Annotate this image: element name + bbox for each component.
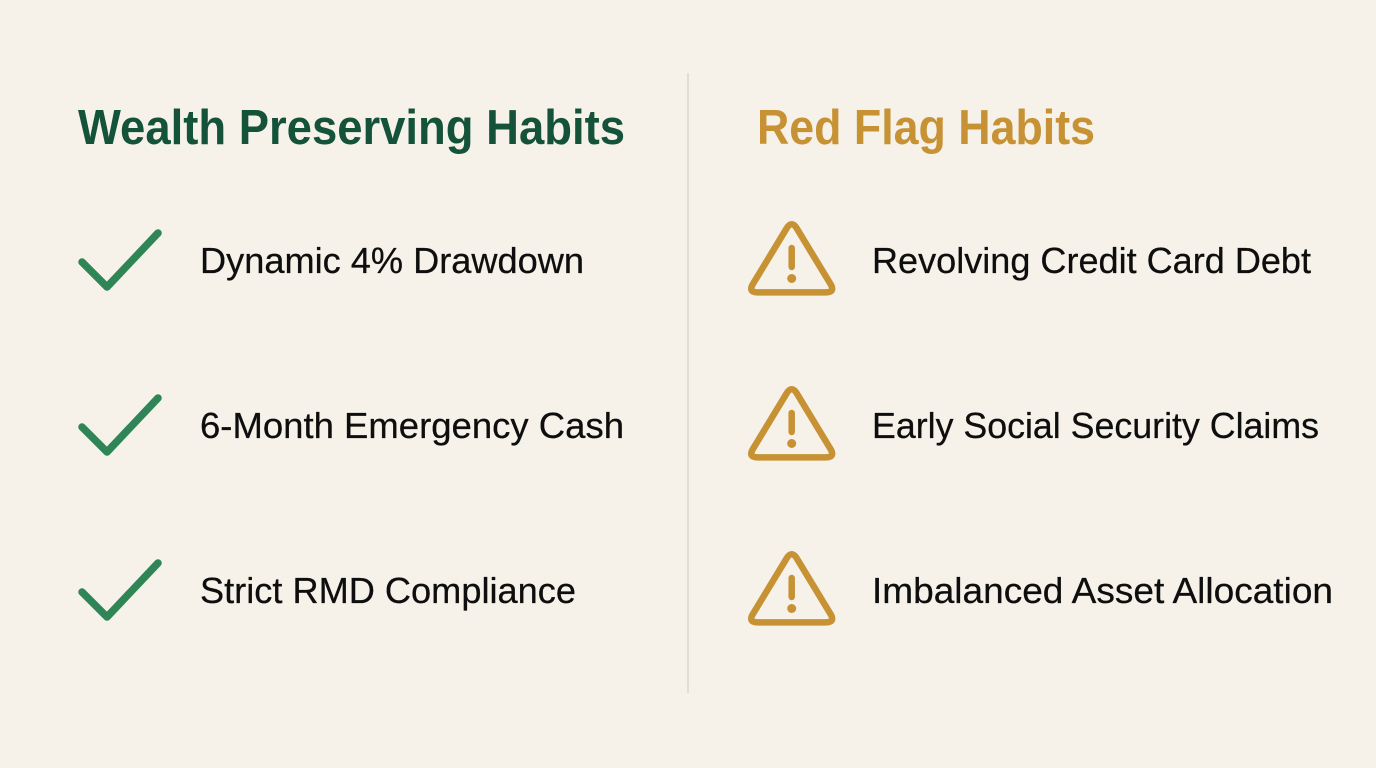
item: early social security claims (751, 389, 1319, 457)
item: 6-month emergency cash (82, 398, 624, 452)
item: imbalanced asset allocation (751, 554, 1333, 622)
label: imbalanced asset allocation: Imbalanced Asset Allocation (872, 570, 1333, 611)
item: revolving credit card debt (751, 224, 1311, 292)
icon: warning triangle (751, 554, 832, 622)
icon: warning triangle (751, 224, 832, 292)
item: strict rmd compliance (82, 563, 576, 617)
label: strict rmd compliance: Strict RMD Compliance (200, 570, 576, 611)
item: dynamic 4% drawdown (82, 233, 584, 287)
icon: warning triangle (751, 389, 832, 457)
label: early social security claims: Early Social Security Claims (872, 405, 1319, 446)
label: 6-month emergency cash: 6-Month Emergency Cash (200, 405, 624, 446)
icon: green check mark (82, 233, 158, 287)
label: dynamic 4% drawdown: Dynamic 4% Drawdown (200, 240, 584, 281)
panel: red flag habits (751, 101, 1333, 622)
heading: wealth preserving habits: Wealth Preserving Habits (78, 101, 625, 155)
heading: red flag habits: Red Flag Habits (757, 101, 1095, 155)
panel: wealth preserving habits (78, 101, 625, 617)
icon: green check mark (82, 563, 158, 617)
label: revolving credit card debt: Revolving Credit Card Debt (872, 240, 1311, 281)
icon: green check mark (82, 398, 158, 452)
